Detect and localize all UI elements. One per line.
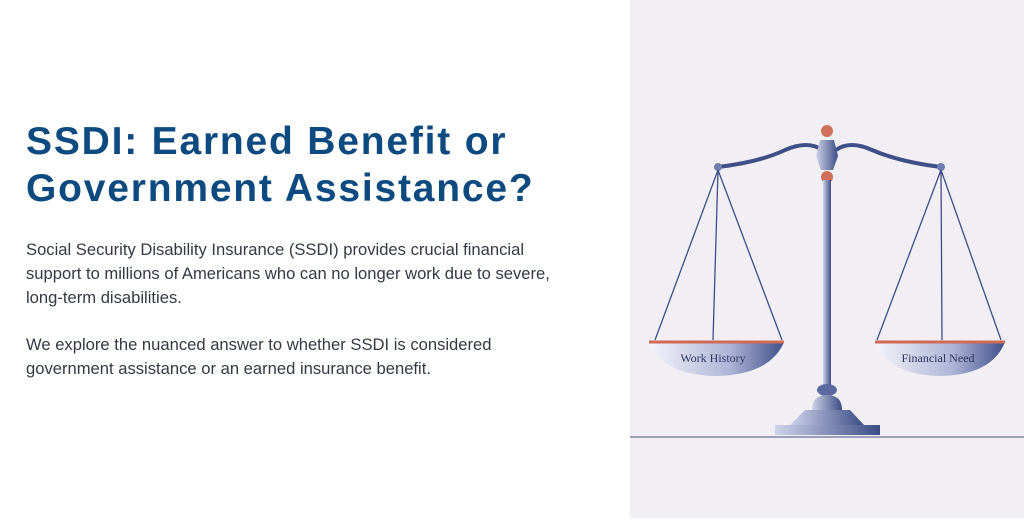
label: financial need: Financial Need <box>902 351 974 365</box>
text block: question: government assistance or an earned insurance benefit. <box>26 359 431 378</box>
text block: question <box>26 335 492 378</box>
panel: scale illustration <box>630 0 1024 518</box>
title <box>26 120 534 210</box>
title: SSDI: Earned Benefit or <box>26 120 507 163</box>
title: Government Assistance? <box>26 167 534 210</box>
text block: intro <box>26 240 550 307</box>
label: work history: Work History <box>680 351 746 365</box>
icon: balance scale <box>649 125 1005 435</box>
text block: question: We explore the nuanced answer to whether SSDI is considered <box>26 335 492 354</box>
text block: intro: support to millions of Americans who can no longer work due to severe, <box>26 264 550 283</box>
text block: intro: Social Security Disability Insurance (SSDI) provides crucial financial <box>26 240 524 259</box>
text block: intro: long-term disabilities. <box>26 288 182 307</box>
horizon line <box>630 436 1024 438</box>
